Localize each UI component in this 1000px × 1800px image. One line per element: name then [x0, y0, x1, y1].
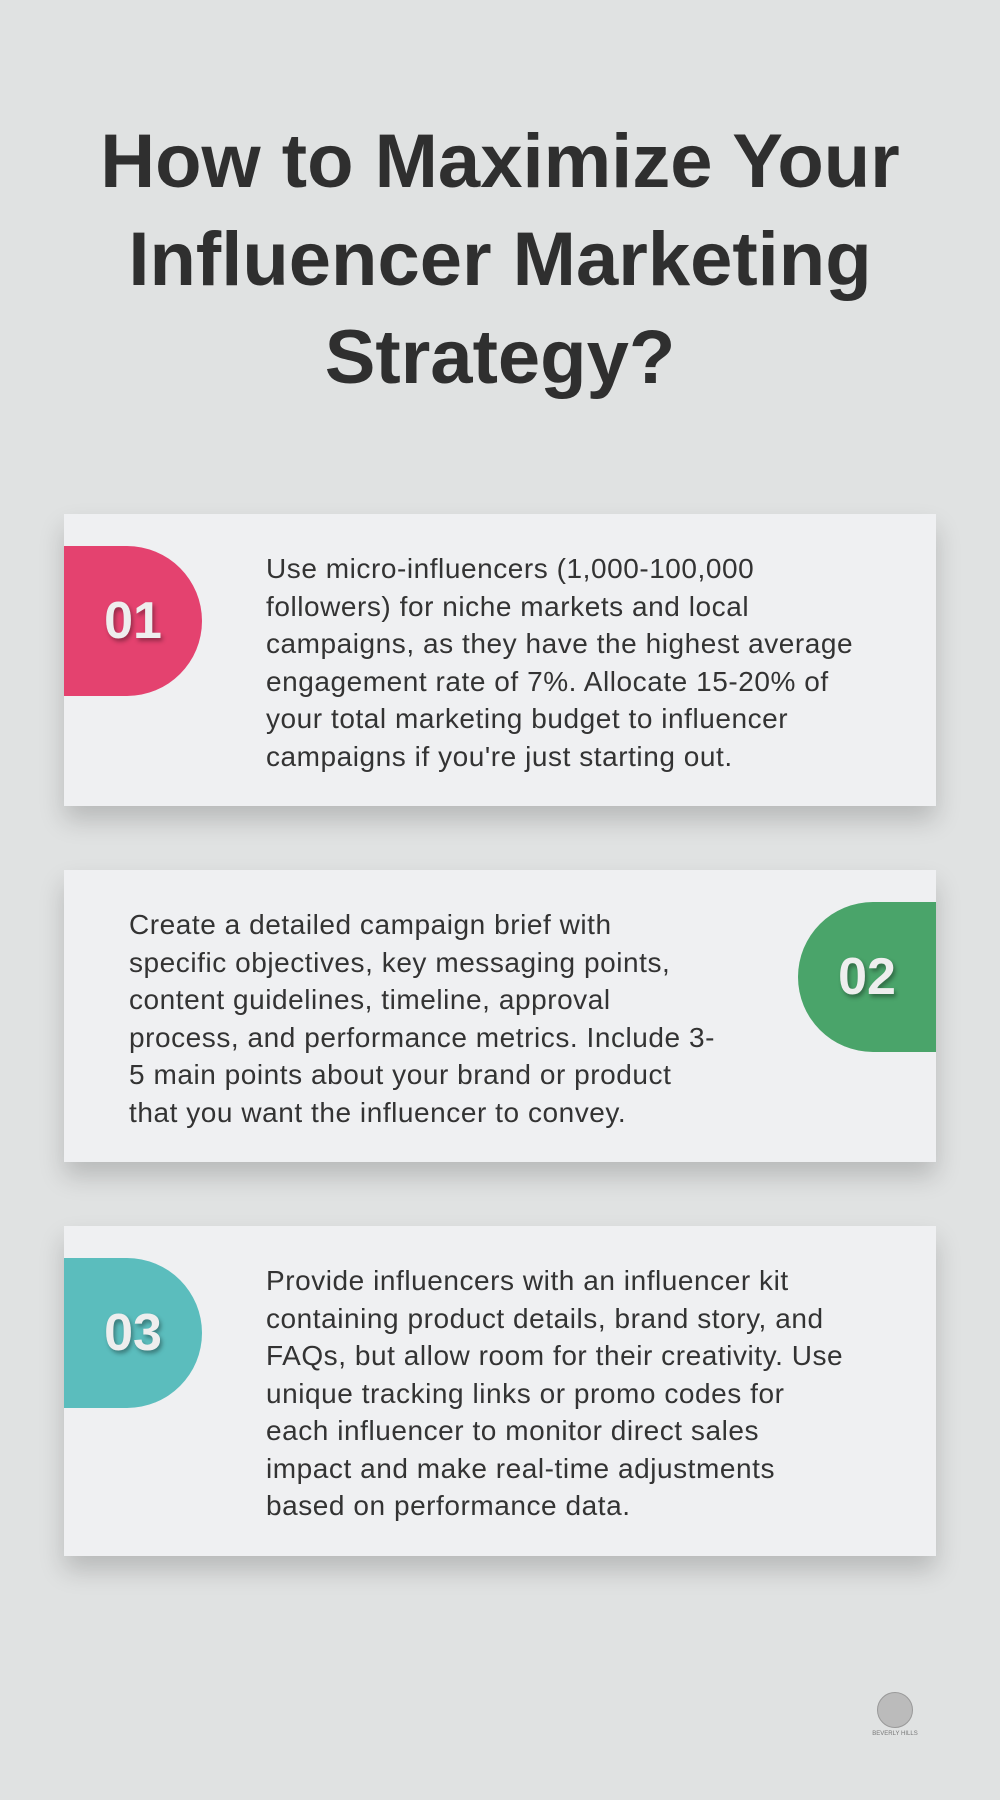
text step 2: [129, 909, 715, 1128]
text step 1: campaigns, as they have the highest average: [266, 628, 853, 659]
text step 1: campaigns if you're just starting out.: [266, 740, 733, 772]
text step 3: impact and make real-time adjustments: [266, 1452, 775, 1484]
text step 3: each influencer to monitor direct sales: [266, 1415, 759, 1446]
text step 1: engagement rate of 7%. Allocate 15-20% of: [266, 666, 829, 696]
text step 2: Create a detailed campaign brief with: [129, 909, 612, 940]
text step 3: [266, 1265, 843, 1521]
badge 01: [64, 546, 202, 696]
text step 1: your total marketing budget to influencer: [266, 703, 788, 734]
text step 3: unique tracking links or promo codes for: [266, 1378, 784, 1408]
panel: step 3: [64, 1226, 936, 1556]
text step 2: 5 main points about your brand or product: [129, 1059, 671, 1090]
text step 1: Use micro-influencers (1,000-100,000: [266, 553, 754, 584]
title: Strategy?: [325, 315, 675, 400]
text step 1: followers) for niche markets and local: [266, 590, 749, 622]
text step 2: that you want the influencer to convey.: [129, 1096, 626, 1128]
text step 2: process, and performance metrics. Include 3-: [129, 1022, 715, 1052]
logo: BEVERLY HILLS: [872, 1731, 918, 1737]
panel: step 2: [64, 870, 936, 1162]
text step 3: Provide influencers with an influencer kit: [266, 1265, 789, 1296]
title: [100, 119, 900, 400]
title: Influencer Marketing: [128, 217, 872, 302]
text step 2: specific objectives, key messaging points,: [129, 946, 670, 978]
text step 3: containing product details, brand story, and: [266, 1302, 824, 1334]
panel: step 1: [64, 514, 936, 806]
badge 03: 03: [104, 1304, 162, 1362]
badge 02: 02: [838, 948, 896, 1006]
badge 03: [64, 1258, 202, 1408]
badge 01: 01: [104, 592, 162, 650]
logo: [872, 1692, 918, 1737]
title: How to Maximize Your: [100, 119, 900, 204]
badge 02: [798, 902, 936, 1052]
text step 2: content guidelines, timeline, approval: [129, 984, 611, 1015]
text step 3: based on performance data.: [266, 1490, 631, 1521]
text step 3: FAQs, but allow room for their creativity. Use: [266, 1340, 843, 1371]
text step 1: [266, 553, 853, 772]
